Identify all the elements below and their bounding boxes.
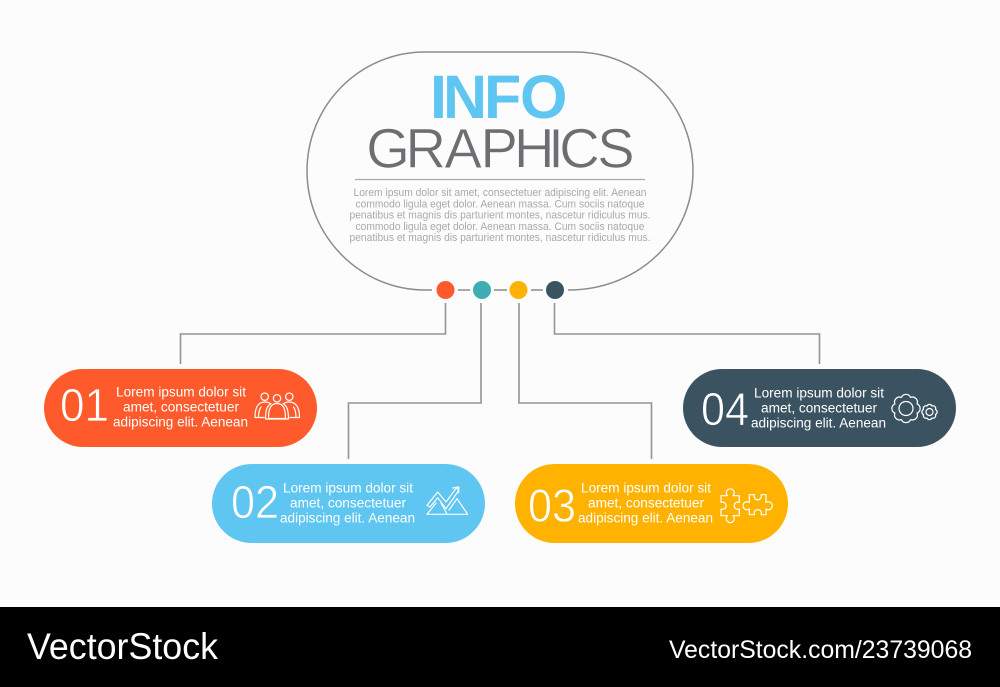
panel: step 04: amet, consectetuer (761, 400, 878, 416)
panel: step 03: amet, consectetuer (588, 496, 705, 510)
panel: step 01: Lorem ipsum dolor sit (116, 384, 246, 400)
icon: puzzle pieces (721, 489, 772, 523)
panel: step 01: adipiscing elit. Aenean (113, 414, 248, 430)
icon: people (255, 393, 300, 419)
panel: step 01: 01 (60, 379, 109, 431)
footer bar (0, 607, 1000, 687)
connector line 01 (180, 303, 446, 364)
panel: step 01 (44, 369, 317, 447)
intro paragraph: penatibus et magnis dis parturient montes, nascetur ridiculus mus. (350, 232, 650, 244)
connector line 04 (554, 303, 820, 364)
panel: step 03: adipiscing elit. Aenean (578, 510, 713, 526)
footer image id: VectorStock.com/23739068 (669, 636, 972, 664)
panel: step 02: Lorem ipsum dolor sit (283, 480, 413, 496)
panel: step 03: 03 (528, 480, 576, 532)
title: GRAPHICS: GRAPHICS (366, 116, 635, 180)
panel: step 04 (683, 369, 956, 447)
connector line 02 (348, 303, 481, 459)
icon: gears (892, 394, 937, 423)
icon: chart mountains (427, 487, 468, 514)
intro paragraph: commodo ligula eget dolor. Aenean massa. Cum sociis natoque (356, 221, 644, 233)
panel: step 01: amet, consectetuer (123, 400, 240, 414)
panel: step 02: adipiscing elit. Aenean (280, 510, 415, 526)
panel: step 04: adipiscing elit. Aenean (751, 416, 886, 430)
intro paragraph: commodo ligula eget dolor. Aenean massa. Cum sociis natoque (356, 198, 644, 210)
title: INFO: INFO (430, 63, 567, 131)
panel: step 04: 04 (701, 383, 749, 435)
panel: step 02: 02 (231, 476, 279, 528)
panel: step 02 (212, 464, 485, 543)
panel: step 04: Lorem ipsum dolor sit (754, 386, 884, 400)
connector line 03 (519, 303, 652, 459)
connector dots row (436, 281, 564, 299)
header outline (307, 52, 693, 290)
intro paragraph: penatibus et magnis dis parturient montes, nascetur ridiculus mus. (350, 210, 650, 222)
panel: step 02: amet, consectetuer (290, 496, 407, 510)
intro paragraph: Lorem ipsum dolor sit amet, consectetuer adipiscing elit. Aenean (354, 187, 646, 199)
panel: step 03: Lorem ipsum dolor sit (581, 480, 711, 496)
panel: step 03 (515, 464, 788, 543)
intro paragraph (350, 187, 650, 244)
footer brand: VectorStock (27, 626, 218, 667)
